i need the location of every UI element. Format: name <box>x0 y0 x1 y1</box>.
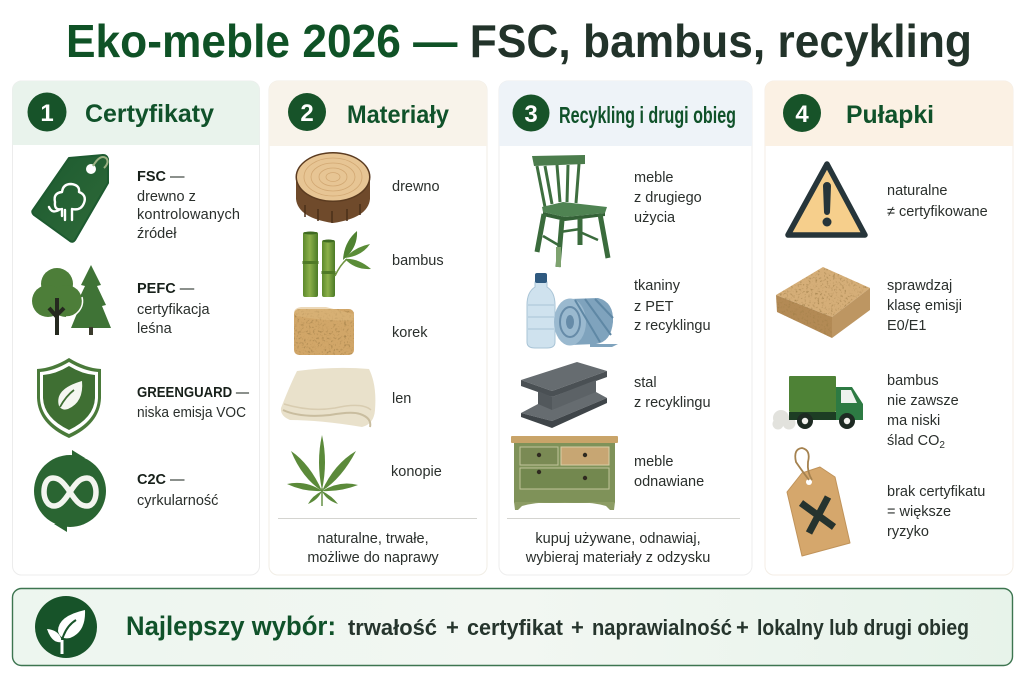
text: emisja <box>887 278 962 334</box>
text: bambus: bambus <box>392 253 444 269</box>
panel: materialy <box>269 81 487 575</box>
header: pulapki: Pułapki <box>846 101 934 129</box>
text: kryteria: certyfikat <box>467 615 564 640</box>
text: drugi uzytek: z drugiego <box>634 190 702 206</box>
text: tkaniny: z recyklingu <box>634 318 711 334</box>
icon: wood slice <box>296 152 370 223</box>
text: C2C: cyrkularność <box>137 493 218 509</box>
text: brak certyfikatu <box>887 484 985 540</box>
header: pulapki: 4 <box>795 101 809 128</box>
text: GREENGUARD: niska emisja VOC <box>137 405 246 421</box>
text: kryteria <box>348 615 969 640</box>
text: C2C <box>137 472 218 509</box>
panel: pulapki <box>765 81 1013 575</box>
text: PEFC <box>137 281 210 337</box>
text: bambus slad: ślad CO <box>887 433 939 449</box>
text: drugi uzytek <box>634 170 702 226</box>
panel: recykling <box>499 81 752 575</box>
text: emisja: E0/E1 <box>887 318 926 334</box>
text: drewno: drewno <box>392 179 440 195</box>
text: emisja: klasę emisji <box>887 298 962 314</box>
text: brak certyfikatu: brak certyfikatu <box>887 484 985 500</box>
icon: steel I-beam <box>521 362 607 428</box>
icon: C2C circular <box>34 450 106 532</box>
text: kryteria: + <box>446 615 459 640</box>
text: PEFC: certyfikacja <box>137 302 210 318</box>
text: FSC: kontrolowanych <box>137 207 240 223</box>
icon: warning triangle <box>788 164 865 235</box>
text: tkaniny: z PET <box>634 299 674 315</box>
text: stal: stal <box>634 375 657 391</box>
header: certyfikaty: Certyfikaty <box>85 100 214 128</box>
text: recykling summary <box>525 531 710 566</box>
text: drugi uzytek: meble <box>634 170 674 186</box>
text: odnawiane: odnawiane <box>634 474 704 490</box>
text: konopie: konopie <box>391 464 442 480</box>
text: brak certyfikatu: = większe <box>887 504 951 520</box>
text: naturalne <box>887 183 988 220</box>
icon: green chair <box>532 155 608 267</box>
icon: refurbished dresser <box>511 436 618 510</box>
text: stal <box>634 375 711 411</box>
icon: linen <box>281 368 375 427</box>
header: recykling <box>499 81 752 146</box>
text: len: len <box>392 391 411 407</box>
text: tkaniny: tkaniny <box>634 278 681 294</box>
icon: FSC tag <box>32 155 108 242</box>
header: materialy: Materiały <box>347 101 449 129</box>
text: FSC: źródeł <box>137 226 177 242</box>
text: GREENGUARD <box>137 385 249 421</box>
header: certyfikaty <box>12 81 260 145</box>
header: materialy: 2 <box>300 100 314 127</box>
panel: certyfikaty <box>12 81 260 575</box>
icon: truck <box>772 376 863 430</box>
text: PEFC: PEFC — <box>137 281 195 297</box>
text: recykling summary: kupuj używane, odnawiaj, <box>535 531 701 547</box>
icon: cork block <box>294 307 354 355</box>
text: GREENGUARD: GREENGUARD — <box>137 385 249 401</box>
icon: kraft tag with X <box>787 448 850 556</box>
text: naturalne: naturalne <box>887 183 947 199</box>
text: materialy summary: możliwe do naprawy <box>307 550 439 566</box>
text: najlepszy wybor: Najlepszy wybór: <box>126 611 336 641</box>
header: materialy <box>269 81 487 146</box>
text: C2C: C2C — <box>137 472 185 488</box>
text: FSC <box>137 169 240 242</box>
text: bambus slad: ma niski <box>887 413 940 429</box>
text: materialy summary: naturalne, trwałe, <box>317 531 429 547</box>
text: bambus slad: 2 <box>939 440 945 451</box>
text: tkaniny <box>634 278 711 334</box>
text: bambus slad <box>887 373 959 451</box>
text: PEFC: leśna <box>137 321 173 337</box>
text: korek: korek <box>392 325 428 341</box>
text: emisja: sprawdzaj <box>887 278 952 294</box>
text: naturalne: ≠ certyfikowane <box>887 204 988 220</box>
text: stal: z recyklingu <box>634 395 711 411</box>
header: recykling: Recykling i drugi obieg <box>559 102 736 128</box>
header: certyfikaty: 1 <box>40 100 54 127</box>
text: brak certyfikatu: ryzyko <box>887 524 929 540</box>
header: recykling: 3 <box>524 101 538 128</box>
text: bambus slad: bambus <box>887 373 939 389</box>
text: recykling summary: wybieraj materiały z odzysku <box>525 550 710 566</box>
icon: GREENGUARD shield <box>37 358 101 438</box>
title: Eko-meble 2026 — FSC, bambus, recykling <box>66 15 972 67</box>
text: FSC: drewno z <box>137 189 196 205</box>
text: kryteria: lokalny lub drugi obieg <box>757 615 969 640</box>
text: materialy summary <box>307 531 439 566</box>
text: kryteria: + <box>571 615 584 640</box>
text: odnawiane <box>634 454 704 490</box>
text: odnawiane: meble <box>634 454 674 470</box>
icon: hemp leaf <box>287 435 358 506</box>
text: drugi uzytek: użycia <box>634 210 676 226</box>
icon: leaf badge <box>35 596 97 658</box>
text: kryteria: naprawialność <box>592 615 732 640</box>
bottom banner <box>12 588 1012 666</box>
text: bambus slad: nie zawsze <box>887 393 959 409</box>
text: FSC: FSC — <box>137 169 185 185</box>
text: kryteria: trwałość <box>348 615 437 640</box>
header: pulapki <box>765 81 1013 146</box>
text: kryteria: + <box>736 615 749 640</box>
icon: PET bottle and fabric roll <box>527 273 618 348</box>
icon: bamboo <box>302 231 371 297</box>
icon: chipboard <box>776 267 870 338</box>
icon: PEFC trees <box>32 265 111 335</box>
